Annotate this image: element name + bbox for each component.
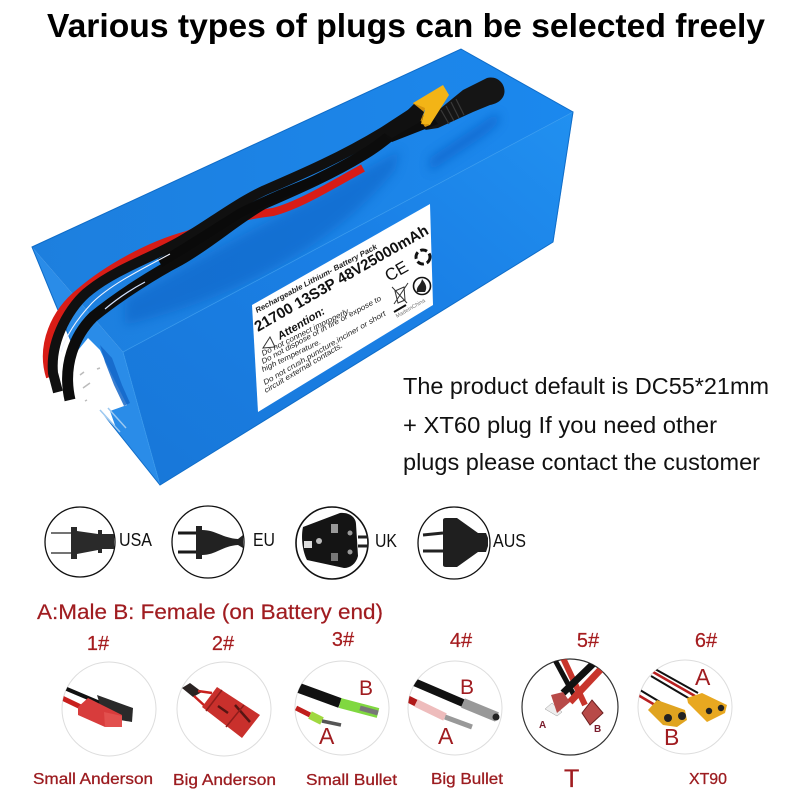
connector 4 big bullet: Big Bullet [431,771,504,788]
EU plug: EU [253,530,275,550]
connector 2 big anderson [173,633,276,789]
warning triangle icon [263,337,275,348]
connector 2 big anderson: 2# [212,633,235,655]
connector 3 small bullet: A [319,723,335,749]
connector 4 big bullet: B [460,676,474,699]
connector 5 T plug: T [564,765,579,793]
USA plug: USA [119,530,152,550]
connector 3 small bullet [295,629,398,789]
label heading: Rechargeable Lithium- Battery Pack [254,242,379,315]
recycle icon [416,250,430,264]
connector 4 big bullet [408,630,504,788]
made in china: MadeInChina [395,298,427,320]
CE mark: CE [382,257,411,285]
connector 5 T plug: 5# [577,630,600,652]
battery top face [32,49,573,352]
DC55*21 plug [385,78,505,142]
connector 6 XT90: XT90 [689,771,727,788]
label model line: 21700 13S3P 48V25000mAh [252,222,432,335]
connector 6 XT90 [638,630,732,788]
connector 1 small anderson [33,633,156,788]
AUS plug: AUS [493,531,526,551]
connector 1 small anderson: 1# [87,633,110,655]
connector 4 big bullet: 4# [450,630,473,652]
UK plug: UK [375,531,397,551]
label warnings: Do not dispose of in fire or expose to [260,294,383,366]
default plug note: The product default is DC55*21mm [403,373,769,399]
USA plug [45,507,152,577]
label warnings: Do not connect improperly. [260,306,352,358]
UK plug [296,507,397,579]
EU plug [172,506,275,578]
battery end white wrap [62,338,127,428]
fire warning icon [414,278,430,294]
connector 6 XT90: B [664,724,679,750]
connector 4 big bullet: A [438,723,454,749]
battery pack photo [32,49,573,485]
WEEE bin icon [392,283,408,312]
label warnings: Do not crush,puncture,inciner or short [262,308,388,387]
connector 5 T plug: A [539,720,546,731]
label attention: Attention: [275,305,328,343]
AUS plug [418,507,526,579]
default plug note [403,373,769,475]
connector 6 XT90: 6# [695,630,718,652]
mains plug row [45,506,526,579]
XT60 plug [384,85,449,138]
connector 2 big anderson: Big Anderson [173,772,276,789]
battery front face [123,112,573,485]
default plug note: + XT60 plug If you need other [403,412,717,438]
connector legend heading: A:Male B: Female (on Battery end) [37,601,383,624]
connector 3 small bullet: B [359,677,373,700]
connector 5 T plug [522,630,618,793]
connector 5 T plug: B [594,724,601,735]
battery left end face [32,247,160,485]
connector 1 small anderson: Small Anderson [33,771,153,788]
connector 3 small bullet: Small Bullet [306,772,398,789]
connector 3 small bullet: 3# [332,629,355,651]
title: Various types of plugs can be selected freely [47,7,766,44]
battery spec label [252,204,433,412]
label warnings: high temperature. [260,337,322,374]
label warnings: circuit external contacts. [262,341,344,395]
black battery cables [53,108,420,400]
red battery cable [47,168,363,377]
label warnings [260,294,388,395]
connector 6 XT90: A [695,664,711,690]
default plug note: plugs please contact the customer [403,449,760,475]
